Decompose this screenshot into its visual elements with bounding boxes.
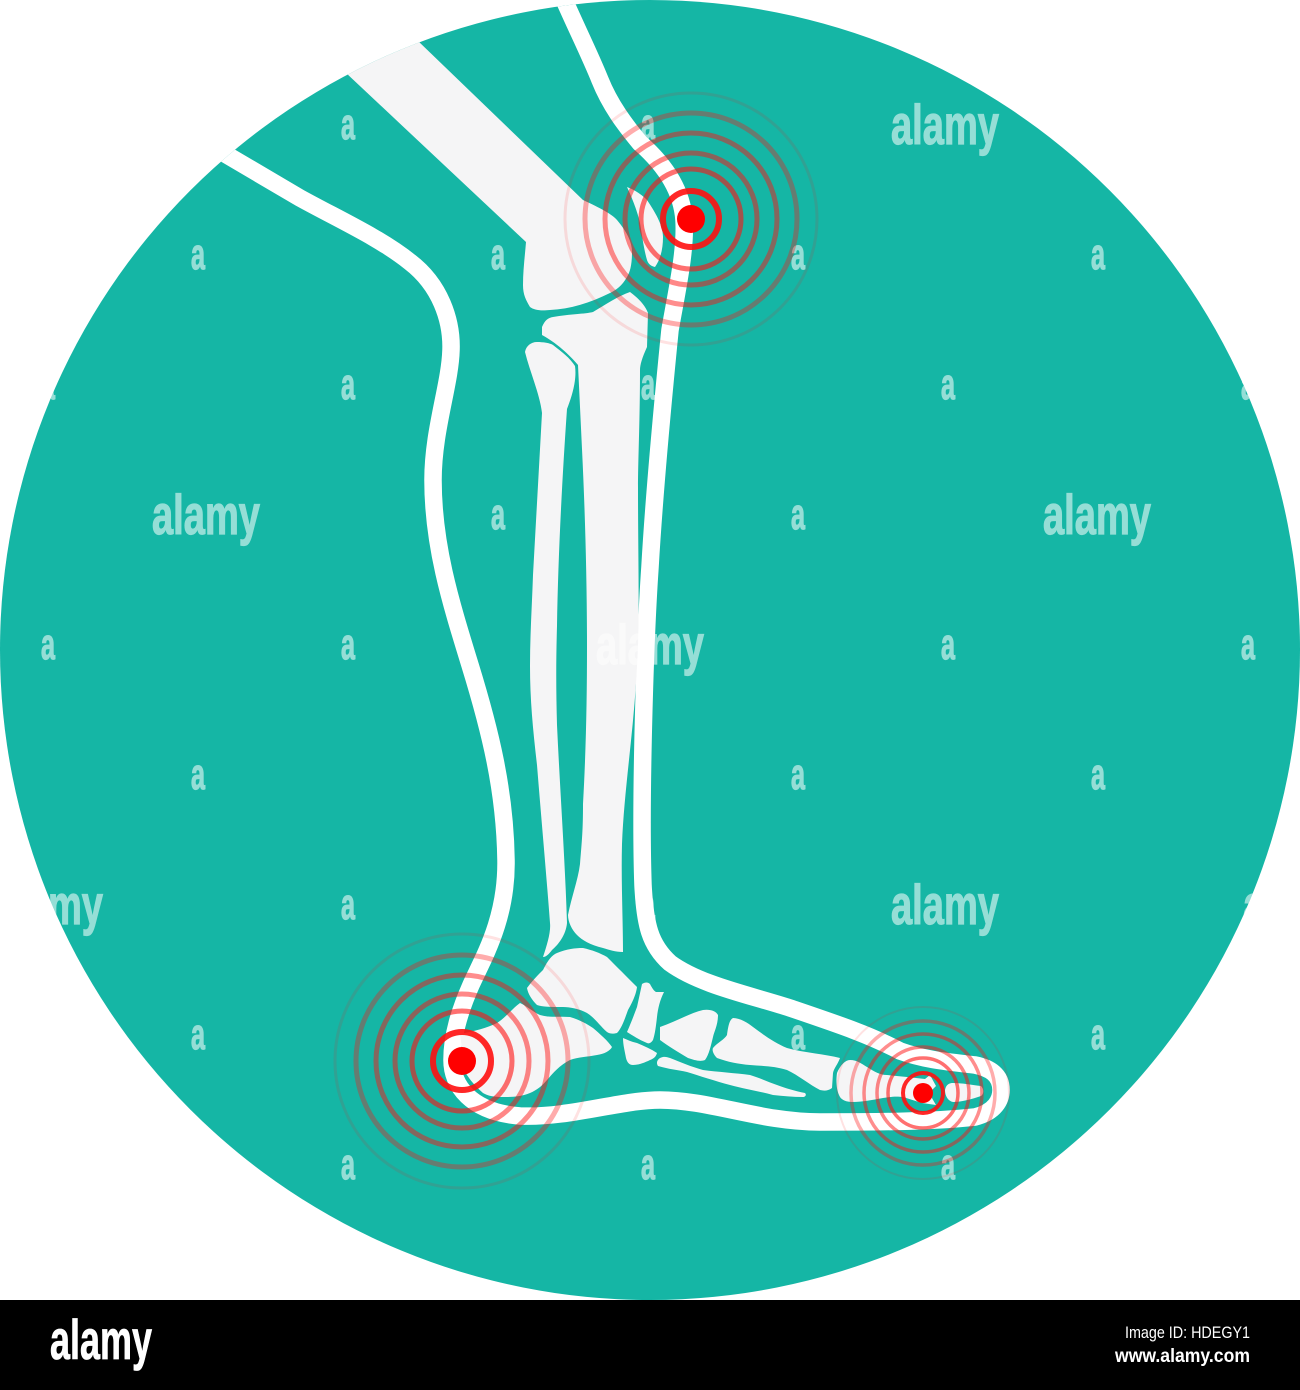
watermark: alamy repeated across disc: a <box>191 1010 205 1059</box>
pain marker: knee <box>565 93 817 345</box>
toe phalanx <box>836 1060 936 1105</box>
toe tip bone <box>945 1083 983 1102</box>
leg skin outline <box>215 0 1001 1122</box>
watermark: alamy repeated across disc: a <box>791 750 805 799</box>
watermark: alamy repeated across disc: a <box>791 1010 805 1059</box>
watermark: alamy repeated across disc: a <box>941 1140 955 1189</box>
first metatarsal <box>713 1018 840 1091</box>
footer image id: Image ID: HDEGY1 <box>1125 1323 1250 1342</box>
watermark: alamy repeated across disc: a <box>1091 230 1105 279</box>
watermark: alamy repeated across disc: a <box>941 620 955 669</box>
watermark: alamy repeated across disc: a <box>1241 620 1255 669</box>
femur <box>345 40 632 310</box>
watermark: alamy repeated across disc: a <box>41 620 55 669</box>
footer logo: alamy <box>50 1308 152 1371</box>
watermark: alamy repeated across disc: alamy <box>596 613 704 676</box>
black footer bar <box>0 1300 1300 1390</box>
watermark: alamy repeated across disc: a <box>641 880 655 929</box>
fibula <box>525 342 575 957</box>
cuneiform bone <box>627 982 664 1043</box>
calcaneus <box>460 1003 612 1097</box>
watermark: alamy repeated across disc: a <box>1091 1010 1105 1059</box>
patella <box>627 187 663 267</box>
lower metatarsal <box>657 1057 806 1097</box>
watermark: alamy repeated across disc: alamy <box>1043 483 1151 546</box>
watermark: alamy repeated across disc: a <box>341 360 355 409</box>
watermark: alamy repeated across disc: a <box>341 1140 355 1189</box>
talus <box>527 948 637 1034</box>
watermark: alamy repeated across disc: a <box>791 490 805 539</box>
pain marker: heel <box>335 934 589 1188</box>
tibia <box>542 292 648 952</box>
footer website: www.alamy.com <box>1114 1346 1250 1367</box>
watermark: alamy repeated across disc: a <box>491 490 505 539</box>
watermark: alamy repeated across disc: a <box>341 100 355 149</box>
cuboid bone <box>623 1038 657 1065</box>
watermark: alamy repeated across disc: a <box>341 620 355 669</box>
watermark: alamy repeated across disc: a <box>41 360 55 409</box>
watermark: alamy repeated across disc: alamy <box>152 483 260 546</box>
watermark: alamy repeated across disc: alamy <box>891 93 999 156</box>
watermark: alamy repeated across disc <box>0 93 1300 1189</box>
watermark: alamy repeated across disc: a <box>791 230 805 279</box>
watermark: alamy repeated across disc: a <box>641 360 655 409</box>
watermark: alamy repeated across disc: a <box>641 1140 655 1189</box>
watermark: alamy repeated across disc: a <box>1241 360 1255 409</box>
midfoot bone <box>660 1010 718 1061</box>
watermark: alamy repeated across disc: alamy <box>891 873 999 936</box>
watermark: alamy repeated across disc: a <box>641 100 655 149</box>
watermark: alamy repeated across disc: a <box>1091 750 1105 799</box>
watermark: alamy repeated across disc: a <box>191 230 205 279</box>
watermark: alamy repeated across disc: a <box>491 230 505 279</box>
pain marker: toe <box>837 1007 1009 1179</box>
watermark: alamy repeated across disc: a <box>191 750 205 799</box>
watermark: alamy repeated across disc: a <box>341 880 355 929</box>
watermark: alamy repeated across disc: a <box>941 360 955 409</box>
